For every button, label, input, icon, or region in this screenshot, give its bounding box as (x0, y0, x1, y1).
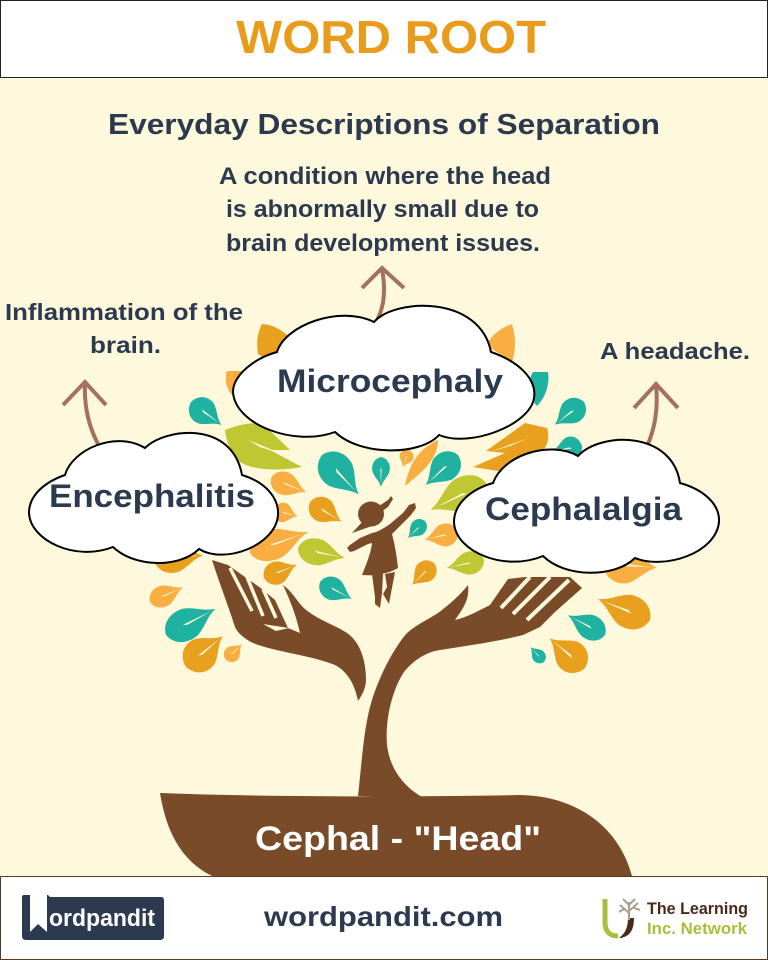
right hand and trunk (358, 577, 582, 798)
definition: encephalitis: brain. (90, 332, 161, 358)
cloud: microcephaly (233, 306, 534, 450)
left hand (212, 560, 366, 701)
definition: microcephaly: A condition where the head (219, 163, 551, 190)
arrow: to encephalitis definition (63, 382, 106, 444)
definition: microcephaly: is abnormally small due to (226, 196, 539, 223)
heading: Everyday Descriptions of Separation (108, 109, 660, 141)
logo: the learning inc. network: The Learning (647, 899, 748, 918)
logo: wordpandit: ordpandit (49, 905, 155, 932)
child silhouette (347, 496, 416, 608)
leaves (146, 324, 658, 680)
definition: cephalalgia: A headache. (600, 338, 750, 364)
header band (0, 0, 768, 78)
definition: encephalitis: Inflammation of the (5, 299, 243, 325)
cloud: encephalitis: Encephalitis (49, 478, 255, 514)
cloud: cephalalgia: Cephalalgia (485, 491, 682, 527)
cloud: encephalitis (29, 433, 278, 563)
tree: hands, trunk and ground (160, 560, 632, 876)
definition: microcephaly: brain development issues. (226, 230, 540, 257)
logo: the learning inc. network (605, 899, 748, 938)
arrow: to cephalalgia definition (634, 384, 678, 444)
root label: Cephal - "Head" (255, 820, 541, 858)
arrow: to microcephaly definition (362, 268, 404, 322)
cloud: cephalalgia (454, 440, 719, 573)
definition: encephalitis (5, 299, 243, 358)
logo: wordpandit (22, 890, 164, 940)
logo: the learning inc. network: Inc. Network (647, 919, 748, 938)
website: wordpandit.com (263, 901, 503, 932)
footer band (0, 876, 768, 960)
title: WORD ROOT (236, 11, 546, 63)
ground (160, 793, 632, 876)
definition: microcephaly (219, 163, 551, 257)
cloud: microcephaly: Microcephaly (277, 363, 503, 399)
